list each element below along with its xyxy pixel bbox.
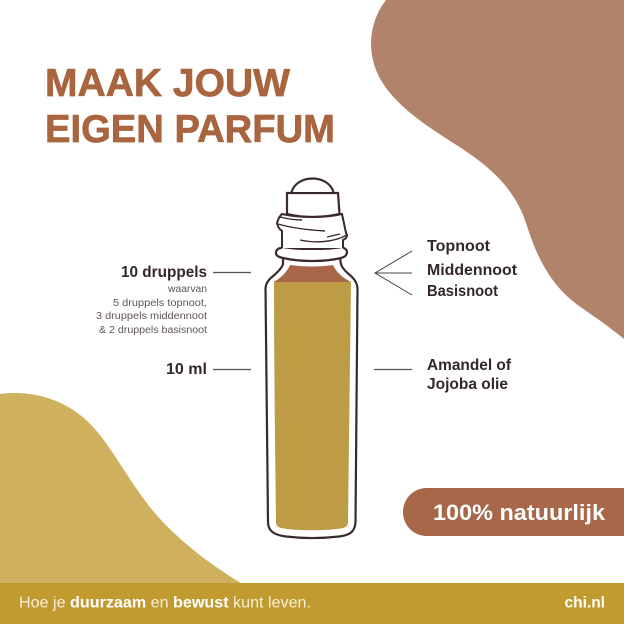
brown blob top right [371, 0, 624, 339]
footer bar: Hoe je duurzaam en bewust kunt leven. [19, 594, 311, 612]
label: notes with three lines: Middennoot [427, 262, 517, 279]
oil liquid [274, 282, 351, 530]
label: notes with three lines: Basisnoot [427, 283, 498, 300]
label: 10 druppels: 3 druppels middennoot [96, 311, 207, 322]
label: carrier oil: Jojoba olie [427, 376, 508, 393]
badge: 100% natuurlijk: 100% natuurlijk [433, 500, 606, 525]
title: MAAK JOUW [45, 62, 290, 105]
collar inner lines [280, 217, 302, 220]
label: 10 druppels: waarvan [167, 284, 207, 295]
title [45, 62, 335, 151]
footer bar: chi.nl [565, 594, 605, 612]
badge: 100% natuurlijk [403, 488, 624, 536]
roller housing [287, 193, 340, 217]
neck ring [276, 248, 347, 261]
label: 10 ml: 10 ml [166, 361, 207, 378]
label: 10 druppels [96, 264, 251, 336]
top note layer [274, 265, 351, 282]
footer bar [0, 583, 624, 624]
collar [277, 214, 347, 249]
label: carrier oil [374, 357, 512, 393]
bottle outline [266, 258, 358, 538]
label: notes with three lines [375, 238, 517, 300]
label: carrier oil: Amandel of [427, 357, 512, 374]
label: 10 druppels: 10 druppels [121, 264, 207, 281]
label: 10 druppels: 5 druppels topnoot, [113, 298, 207, 309]
label: 10 druppels: & 2 druppels basisnoot [99, 325, 207, 336]
roller ball [292, 178, 334, 192]
title: EIGEN PARFUM [45, 108, 335, 151]
bottle illustration [266, 178, 358, 538]
label: 10 ml [166, 361, 251, 378]
gold blob bottom left [0, 393, 241, 583]
label: notes with three lines: Topnoot [427, 238, 490, 255]
